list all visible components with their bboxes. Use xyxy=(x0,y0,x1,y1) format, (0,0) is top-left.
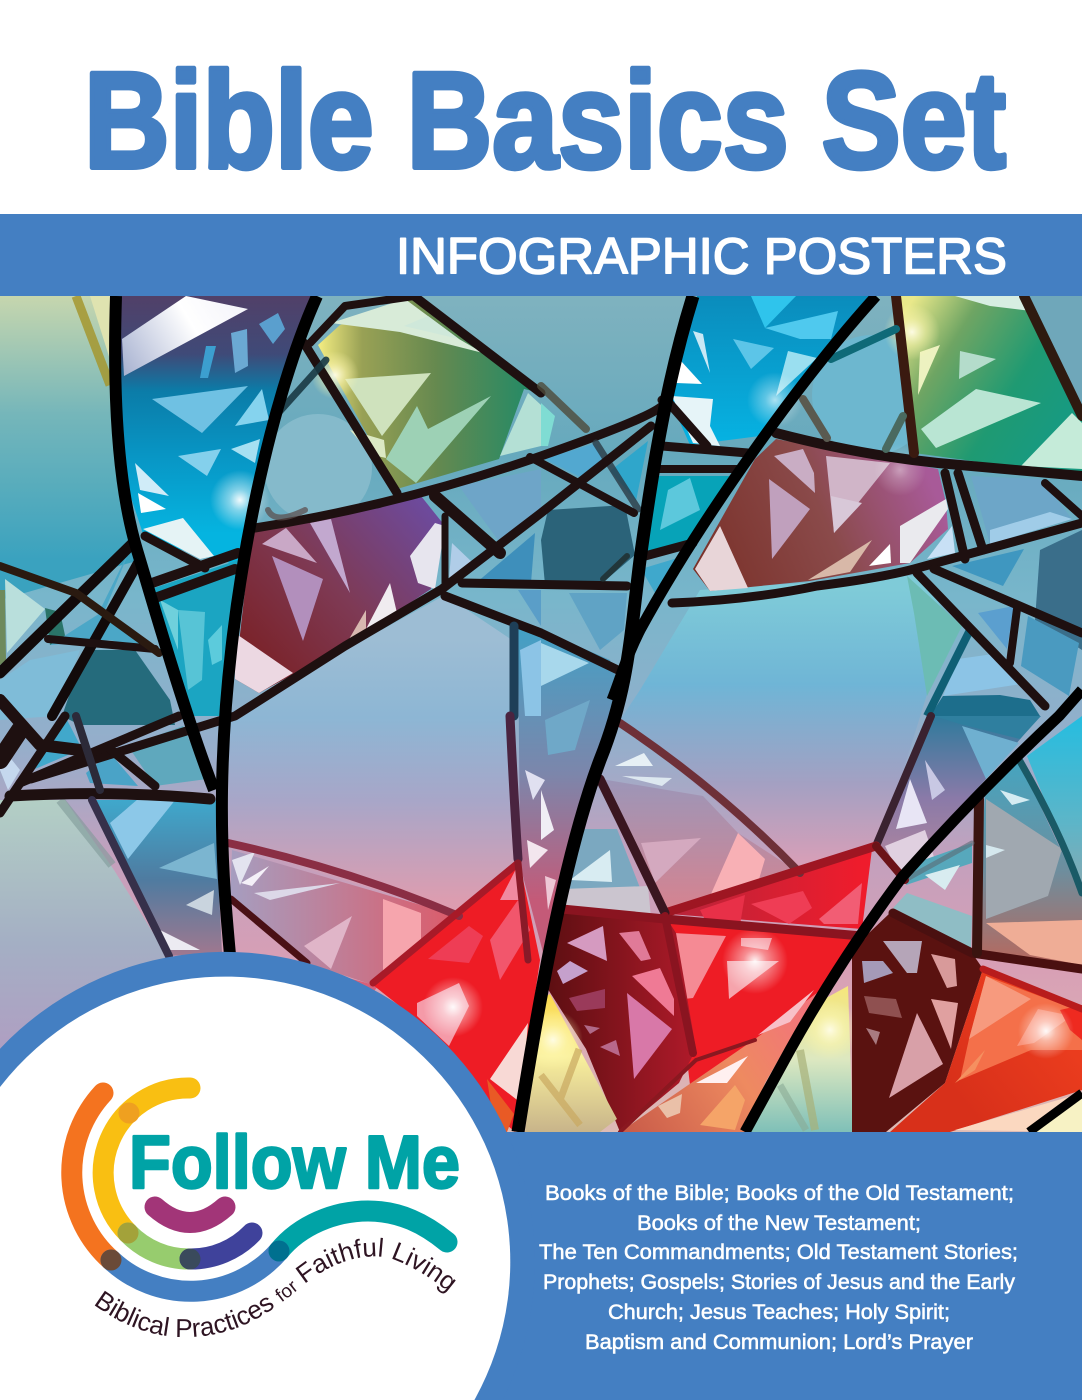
panel: right side blue glass xyxy=(907,476,1079,716)
logo arcs xyxy=(72,1088,447,1291)
logo overlap dots xyxy=(100,1102,290,1270)
panel: dark maroon glass, centre xyxy=(544,913,696,1132)
panel: central pink glass xyxy=(562,753,800,918)
bottom text panel: Books of the New Testament; xyxy=(637,1211,921,1235)
panel: left red glass xyxy=(373,865,540,1132)
panel: main red glass xyxy=(665,849,872,1085)
dark leading lines xyxy=(0,296,1082,963)
subtitle band xyxy=(0,214,1082,296)
panel: purple maroon glass xyxy=(235,496,445,693)
panel: lower right blue glass xyxy=(880,716,1082,969)
panel: left mid glass cluster xyxy=(0,545,238,790)
subtitle band: INFOGRAPHIC POSTERS xyxy=(396,228,1007,284)
panel: top right green glass xyxy=(884,296,1082,476)
olive strut and orange corner xyxy=(72,296,110,387)
panel: maroon magenta glass xyxy=(693,439,948,591)
panel: upper centre glass xyxy=(449,403,733,650)
bottom text panel: Prophets; Gospels; Stories of Jesus and the Early xyxy=(543,1270,1015,1294)
bottom text panel: Church; Jesus Teaches; Holy Spirit; xyxy=(608,1300,950,1324)
panel: top left blue glass xyxy=(116,296,317,565)
bottom text panel: Baptism and Communion; Lord’s Prayer xyxy=(585,1330,973,1354)
stained glass illustration xyxy=(0,296,1082,1132)
panel: orange glass, bottom centre xyxy=(620,990,817,1132)
panel: top green glass xyxy=(311,296,541,489)
panel: lower left blue glass xyxy=(60,799,222,956)
logo tagline: Biblical Practices for Faithful Living xyxy=(94,1238,456,1337)
maroon leading lines xyxy=(228,716,1082,1132)
logo: Follow Me xyxy=(61,1078,460,1337)
bottom text panel: The Ten Commandments; Old Testament Stories; xyxy=(539,1240,1018,1264)
panel: right red orange glass xyxy=(890,969,1082,1132)
panel: pale yellow green glass xyxy=(751,986,852,1132)
panel: top right blue glass xyxy=(670,296,876,446)
panel: dark maroon glass, right xyxy=(852,913,983,1132)
logo wordmark: Follow Me xyxy=(129,1120,460,1204)
white logo circle with blue ring xyxy=(0,952,535,1400)
black leading lines xyxy=(115,296,1082,1132)
bottom text panel: Books of the Bible; Books of the Old Testament; xyxy=(545,1181,1014,1205)
panel: yellow glass, bottom centre xyxy=(523,994,617,1132)
bottom text panel xyxy=(0,1132,1082,1400)
panel: centre blue to rose band xyxy=(518,629,615,952)
panel: rose glass xyxy=(230,850,448,990)
